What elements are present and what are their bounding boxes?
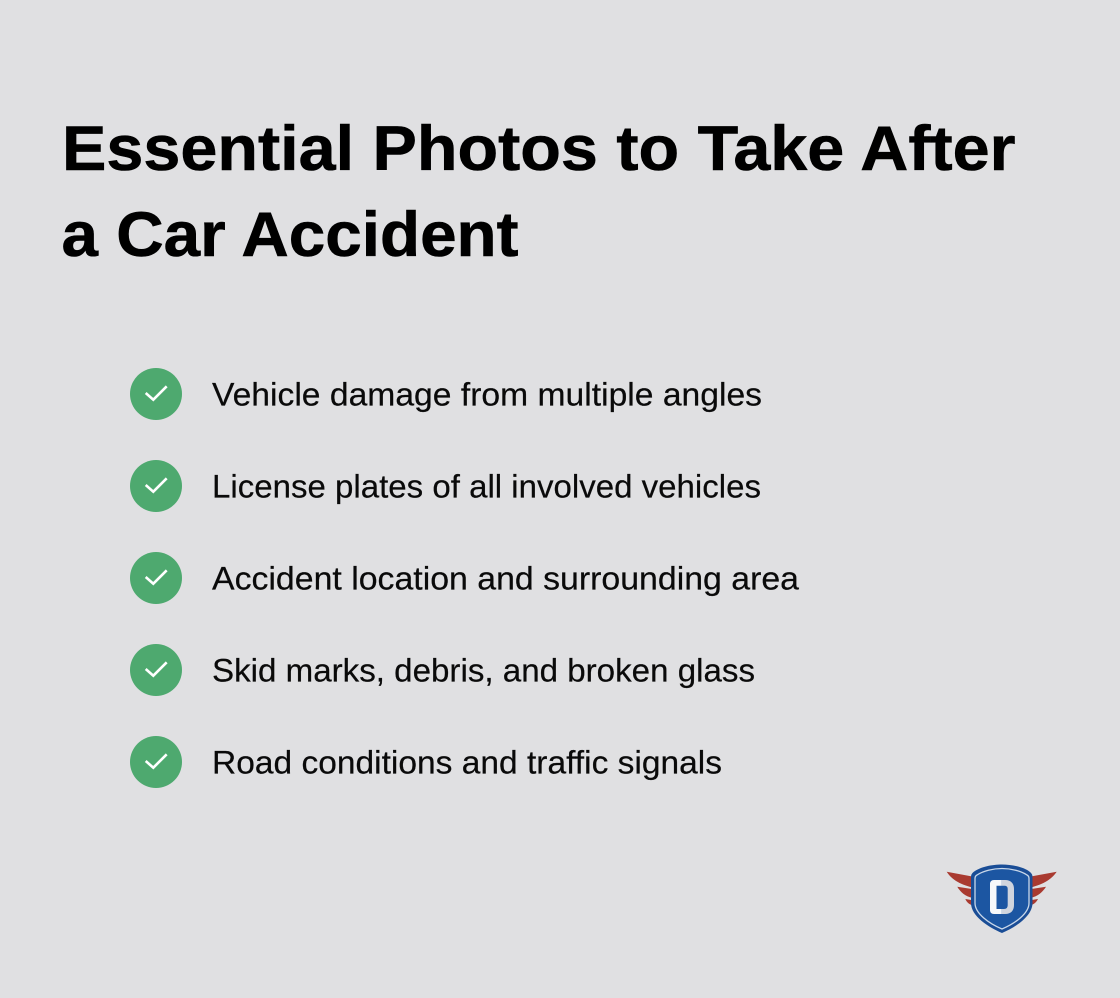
item: road conditions: Road conditions and traffic signals bbox=[212, 744, 722, 780]
item: vehicle damage: Vehicle damage from multiple angles bbox=[212, 376, 762, 412]
icon: shield logo with wings bbox=[947, 864, 1057, 933]
item: accident location: Accident location and surrounding area bbox=[212, 560, 799, 596]
item: accident location bbox=[130, 552, 799, 604]
title bbox=[62, 114, 1015, 270]
checklist bbox=[130, 368, 799, 788]
item: skid marks: Skid marks, debris, and broken glass bbox=[212, 652, 755, 688]
item: license plates bbox=[130, 460, 761, 512]
title: Essential Photos to Take After bbox=[62, 114, 1015, 184]
item: road conditions bbox=[130, 736, 722, 788]
title: a Car Accident bbox=[62, 200, 518, 270]
item: vehicle damage bbox=[130, 368, 762, 420]
item: license plates: License plates of all involved vehicles bbox=[212, 468, 761, 504]
item: skid marks bbox=[130, 644, 755, 696]
